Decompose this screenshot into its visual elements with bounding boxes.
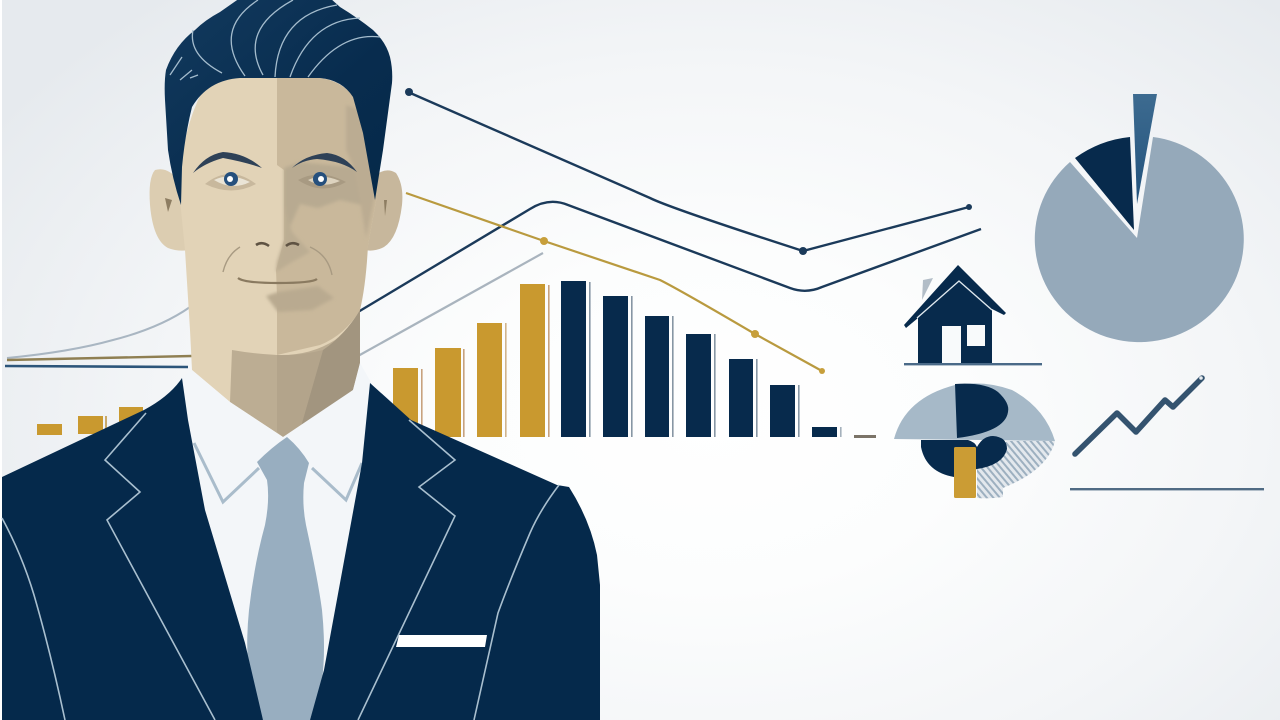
line chart: grey line [358, 253, 543, 356]
hatched segment [977, 441, 1055, 498]
eye: right [298, 172, 346, 189]
eye: left [205, 172, 256, 190]
baseline under growth arrow [1070, 488, 1264, 490]
ear: left inner mark [165, 198, 172, 212]
ear: left [150, 169, 190, 251]
gold bar [954, 447, 976, 498]
hair highlight strands [170, 0, 380, 80]
suit jacket [2, 378, 600, 720]
cap [894, 383, 1055, 441]
neck shadow: right [300, 310, 360, 430]
face shading patches [266, 105, 376, 312]
ear: right [364, 170, 402, 251]
line chart: upper navy line [405, 88, 972, 255]
left-side trend lines [5, 307, 192, 367]
hair [165, 0, 392, 205]
suit lapel and seam lines [2, 413, 559, 720]
eyebrow: left [193, 152, 262, 173]
pie chart [1035, 94, 1244, 342]
eye-area shadow [282, 162, 360, 223]
face light side [178, 78, 378, 437]
icon: zigzag growth arrow [1075, 376, 1203, 454]
pie: detached blue wedge [1133, 94, 1157, 204]
face mid-tone side [276, 78, 378, 355]
icon: segmented mushroom-shaped chart [894, 383, 1055, 498]
pocket square [396, 635, 487, 647]
eyebrow: right [292, 153, 357, 172]
bar chart: gold and navy bars [393, 281, 876, 438]
line chart: gold line [406, 193, 825, 374]
chin shadow [266, 286, 334, 312]
pie: large slice [1035, 137, 1244, 342]
necktie [247, 437, 324, 720]
collar lines [194, 443, 362, 502]
figure: businessman [2, 0, 600, 720]
shirt [182, 363, 372, 720]
bar chart: small gold bars at left [37, 407, 143, 435]
neck shadow [230, 310, 360, 437]
line chart: lower navy line [358, 202, 981, 312]
navy upper blob [955, 384, 1008, 438]
mouth [238, 278, 317, 283]
icon: house [904, 265, 1042, 365]
nose shadow [275, 230, 308, 271]
neck shadow: centre [277, 350, 323, 437]
temple shadow [346, 106, 374, 230]
nose [223, 243, 332, 275]
ear: right inner mark [384, 200, 387, 216]
navy lower blob [921, 436, 1007, 477]
pie: navy slice [1075, 137, 1134, 230]
